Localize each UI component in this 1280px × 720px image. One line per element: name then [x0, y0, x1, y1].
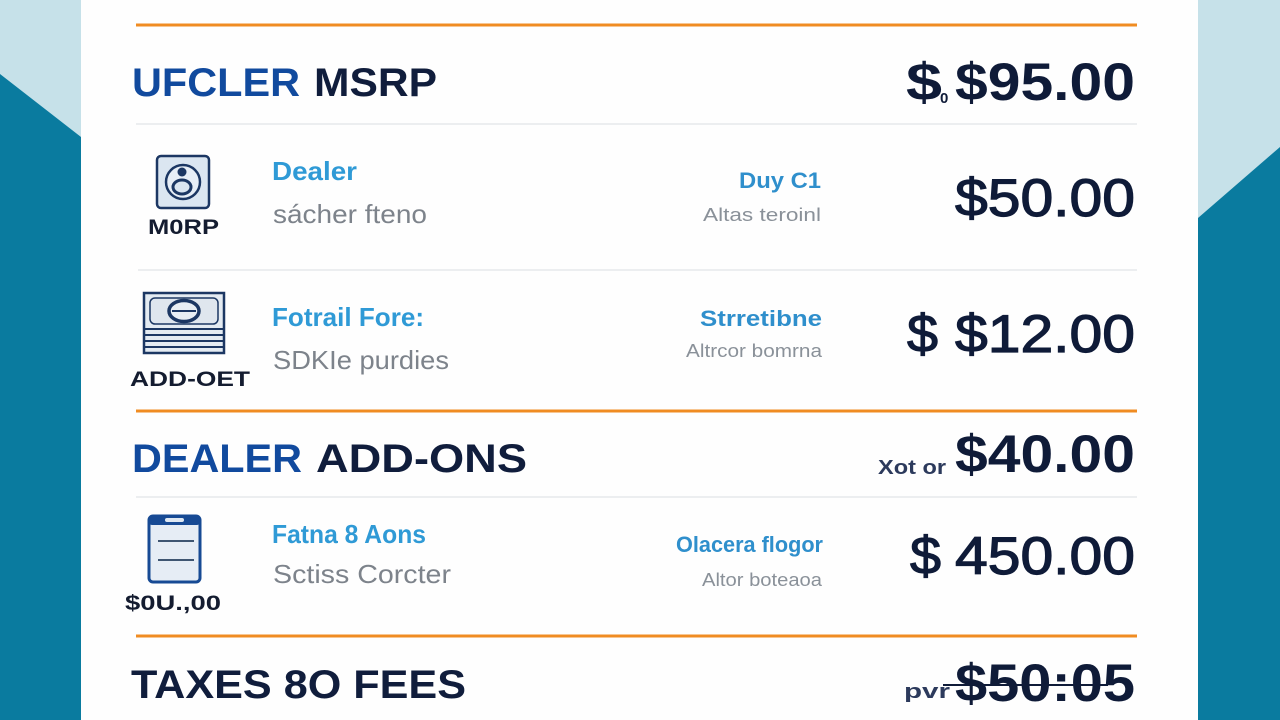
price: Fotrail row: $	[907, 305, 938, 364]
price: MSRP total: $95.00	[955, 53, 1135, 112]
row text: Fotrail Fore: Fotrail Fore:	[272, 302, 424, 332]
row text: Fatna 8 Aons: Sctiss Corcter	[273, 559, 451, 589]
price: Taxes struck-through: pvr	[904, 681, 950, 703]
row note: Olacera flogor	[676, 532, 823, 590]
row text: Dealer: sácher fteno	[273, 199, 427, 229]
icon: MSRP badge	[157, 156, 209, 208]
heading: Taxes and fees: TAXES 8O FEES	[131, 663, 466, 707]
icon label: ADD-OET: ADD-OET	[130, 368, 250, 391]
row note: Olacera flogor: Altor boteaoa	[702, 570, 823, 590]
price: Dealer row: $50.00	[955, 169, 1135, 228]
price: Dealer add-ons total: $40.00	[955, 425, 1135, 484]
icon label: SOUT..00: $0U.,00	[125, 592, 221, 615]
row text: Dealer: Dealer	[272, 156, 357, 186]
price: Taxes struck-through: $50:05	[955, 654, 1135, 713]
icon label: MORP: M0RP	[148, 216, 219, 239]
row note: Duy C1: Duy C1	[739, 168, 821, 193]
row text: Fatna 8 Aons	[272, 519, 451, 589]
row note: Duy C1: Altas teroinl	[703, 205, 821, 225]
row note: Strretibne: Altrcor bomrna	[686, 341, 823, 361]
price: Fatna row: 450.00	[955, 527, 1135, 586]
price: MSRP total: $	[906, 53, 942, 112]
row text: Fotrail Fore: SDKIe purdies	[273, 345, 449, 375]
heading: Dealer add-ons	[132, 437, 527, 481]
heading: MSRP section: MSRP	[314, 61, 437, 105]
background: left teal panel	[0, 74, 81, 720]
row note: Olacera flogor: Olacera flogor	[676, 532, 823, 557]
heading: Dealer add-ons: ADD-ONS	[316, 437, 527, 481]
row note: Strretibne	[686, 306, 823, 361]
row text: Dealer	[272, 156, 427, 229]
icon: clipboard document	[149, 516, 200, 582]
price: Fotrail row: $12.00	[955, 305, 1135, 364]
icon: banknote stack	[144, 293, 224, 353]
row text: Fotrail Fore	[272, 302, 449, 375]
row note: Duy C1	[703, 168, 821, 225]
price: Dealer add-ons total: Xot or	[878, 457, 946, 479]
heading: Dealer add-ons: DEALER	[132, 437, 302, 481]
background: right teal panel	[1198, 147, 1280, 720]
row text: Fatna 8 Aons: Fatna 8 Aons	[272, 519, 426, 549]
price: Dealer add-ons total	[878, 425, 1135, 484]
heading: MSRP section: UFCLER	[132, 61, 300, 105]
row note: Strretibne: Strretibne	[700, 306, 822, 331]
price: Fatna row: $	[910, 527, 941, 586]
heading: MSRP section	[132, 61, 437, 105]
price: MSRP total: 0	[940, 90, 948, 107]
